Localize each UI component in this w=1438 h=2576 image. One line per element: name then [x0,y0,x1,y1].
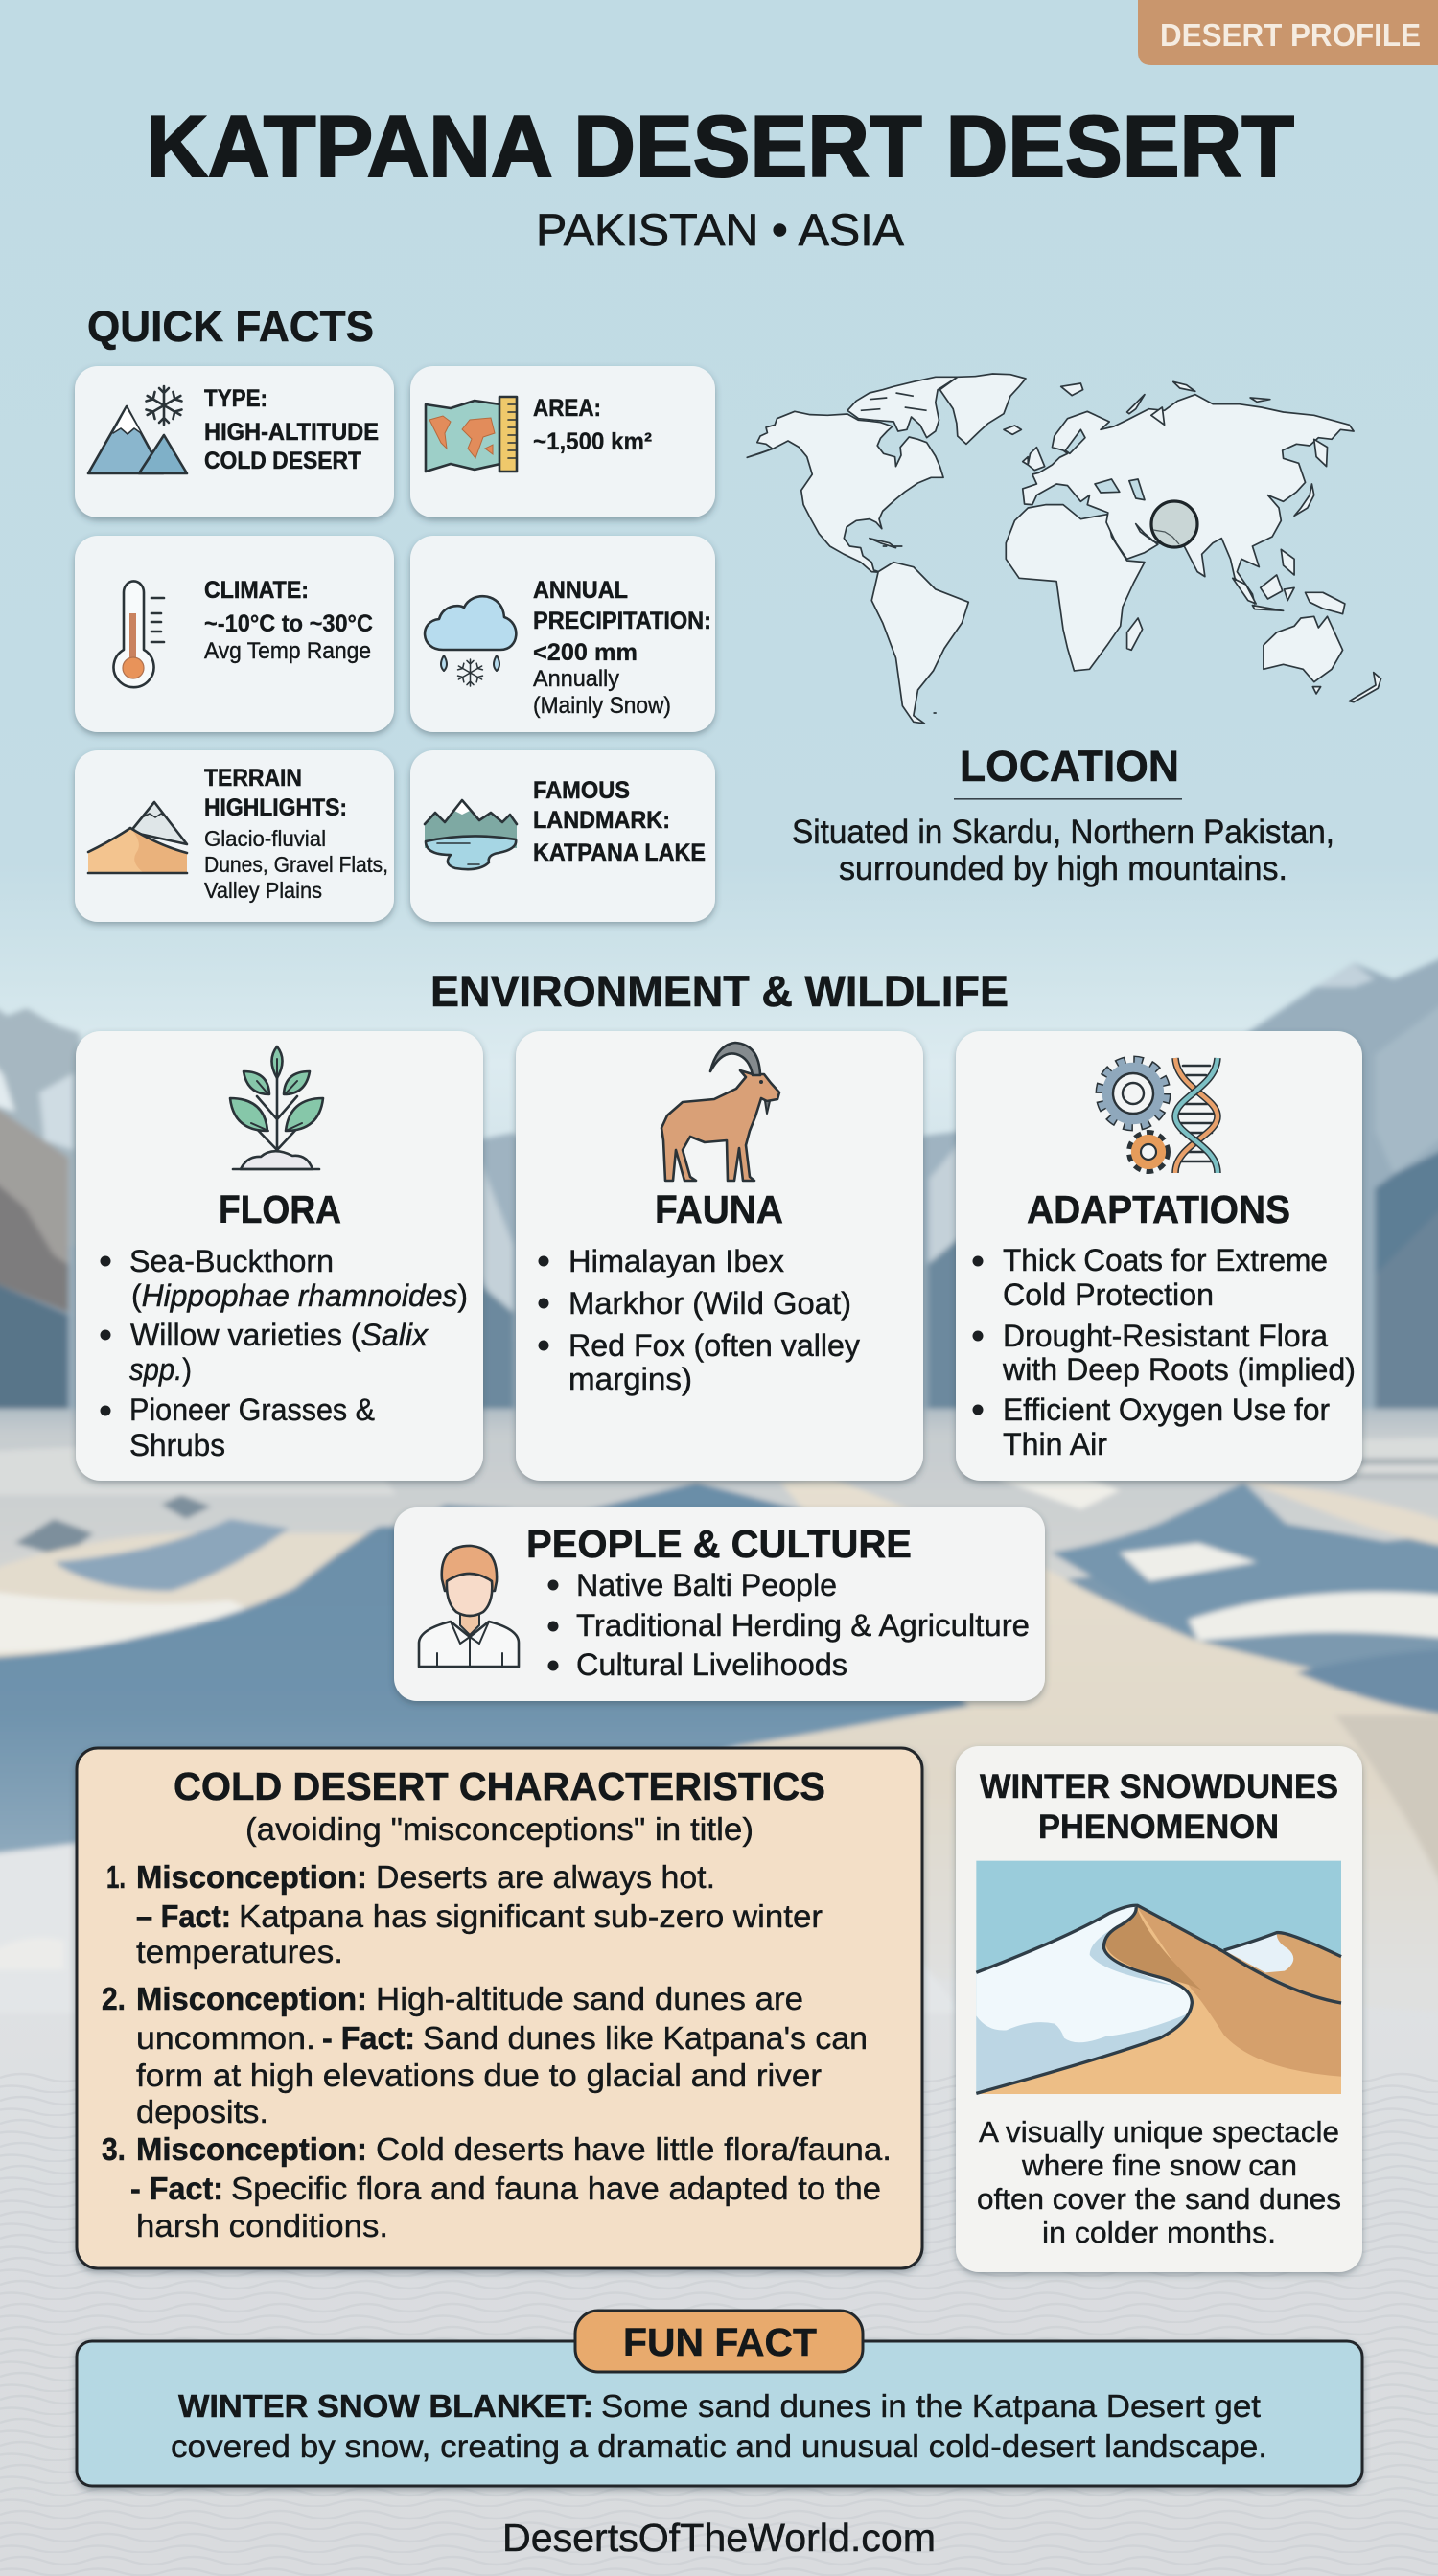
item 2: Misconception: [136,1981,367,2016]
list: adaptations: Thin Air [1003,1427,1107,1461]
panel: terrain highlights: HIGHLIGHTS: [204,794,347,821]
panel: flora [76,1031,483,1481]
panel: famous landmark: KATPANA LAKE [533,840,706,866]
icon: person [419,1546,519,1667]
item 2: uncommon. [136,2020,315,2056]
icon: thermometer [113,581,164,687]
panel: famous landmark: FAMOUS [533,777,630,804]
panel: adaptations [956,1031,1362,1481]
caption: A visually unique spectacle [979,2115,1339,2149]
list: adaptations [972,1243,1356,1461]
icon: dune and mountain [88,802,187,873]
item 3: harsh conditions. [136,2208,388,2243]
list: flora species: Pioneer Grasses & [129,1392,375,1427]
item 1: 1. [106,1859,126,1895]
list: fauna species: Red Fox (often valley [568,1328,860,1363]
list: fauna species [539,1244,860,1396]
item 2 [102,1981,868,2129]
item 1: – Fact: [136,1898,231,1934]
heading [980,1768,1338,1846]
caption: where fine snow can [1021,2149,1297,2182]
panel: fauna: FAUNA [655,1187,783,1231]
item 1: temperatures. [136,1934,343,1969]
list: adaptations: Efficient Oxygen Use for [1003,1392,1330,1427]
heading: location: LOCATION [960,742,1179,791]
text: fun fact body: Some sand dunes in the Katpana Desert get [601,2388,1261,2424]
panel: winter snowdunes phenomenon [956,1746,1362,2272]
item 2: Sand dunes like Katpana's can [423,2020,868,2056]
panel: climate [75,536,394,732]
panel: terrain highlights: Dunes, Gravel Flats, [204,852,388,877]
list: flora species: spp.) [129,1352,192,1387]
badge: fun fact: FUN FACT [623,2320,817,2364]
panel: type [75,366,394,518]
item 2: - Fact: [322,2020,415,2056]
panel: people and culture: PEOPLE & CULTURE [526,1522,912,1566]
list: fauna species: Markhor (Wild Goat) [568,1286,851,1321]
text: location description: surrounded by high mountains. [839,850,1287,887]
icon: cloud with rain and snow [425,596,516,686]
list: fauna species: margins) [568,1362,692,1396]
panel: famous landmark [410,750,715,922]
list: people: Cultural Livelihoods [576,1647,847,1682]
list: flora species: Shrubs [129,1428,225,1462]
caption: in colder months. [1042,2216,1276,2249]
panel: area: AREA: [533,395,601,422]
item 3 [102,2131,892,2243]
panel: annual precipitation [410,536,715,732]
footer: DesertsOfTheWorld.com [502,2516,936,2560]
panel: annual precipitation: (Mainly Snow) [533,693,671,719]
panel: area: ~1,500 km² [533,428,652,455]
panel: climate: ~-10°C to ~30°C [204,610,373,637]
text: location description: Situated in Skardu, Northern Pakistan, [792,814,1334,851]
icon: mountains and snowflake [88,386,187,473]
heading: quick facts: QUICK FACTS [87,302,374,351]
illustration: snow-covered dunes [976,1861,1341,2094]
item 1 [106,1859,823,1969]
panel: adaptations: ADAPTATIONS [1027,1187,1290,1231]
panel: flora: FLORA [219,1187,341,1231]
icon: lake and mountains [425,800,517,869]
text: fun fact body: covered by snow, creating a dramatic and unusual cold-desert landscape. [171,2428,1267,2464]
panel: famous landmark: LANDMARK: [533,807,670,834]
list: fauna species: Himalayan Ibex [568,1244,784,1278]
panel: terrain highlights: TERRAIN [204,765,302,792]
panel: annual precipitation: PRECIPITATION: [533,608,711,634]
list: adaptations: Drought-Resistant Flora [1003,1319,1328,1353]
heading: PHENOMENON [1038,1808,1279,1846]
panel: cold desert characteristics [77,1748,922,2268]
heading: WINTER SNOWDUNES [980,1768,1338,1806]
panel: climate: Avg Temp Range [204,638,371,664]
panel: fauna [516,1031,923,1481]
list: people [548,1568,1030,1682]
icon: gears and DNA [1101,1058,1218,1173]
panel: annual precipitation: Annually [533,666,619,692]
item 3: Misconception: [136,2131,367,2167]
icon: map and ruler [426,397,517,472]
item 1: Katpana has significant sub-zero winter [239,1898,823,1934]
list: adaptations: Cold Protection [1003,1277,1214,1312]
list: flora species: (Hippophae rhamnoides) [131,1278,468,1313]
item 2: 2. [102,1981,126,2016]
panel: type: COLD DESERT [204,448,361,474]
panel: people and culture [394,1507,1045,1701]
panel: annual precipitation: ANNUAL [533,577,628,604]
caption [977,2115,1341,2249]
item 2: form at high elevations due to glacial and river [136,2058,822,2093]
item 1: Misconception: [136,1859,367,1895]
panel: type: HIGH-ALTITUDE [204,419,379,446]
icon: ibex [661,1043,779,1181]
text: location description [792,814,1334,887]
panel: annual precipitation: <200 mm [533,639,638,666]
panel: terrain highlights: Glacio-fluvial [204,826,326,851]
panel: terrain highlights [75,750,394,922]
item 2: High-altitude sand dunes are [376,1981,803,2016]
title: KATPANA DESERT DESERT [146,99,1294,196]
panel: type: TYPE: [204,385,267,412]
panel: area [410,366,715,518]
badge: desert profile: DESERT PROFILE [1160,17,1421,53]
item 3: Cold deserts have little flora/fauna. [376,2131,892,2167]
text: fun fact body [171,2388,1267,2464]
heading: environment and wildlife: ENVIRONMENT & WILDLIFE [430,967,1009,1016]
panel: climate: CLIMATE: [204,577,309,604]
caption: often cover the sand dunes [977,2182,1341,2216]
item 3: - Fact: [130,2171,223,2206]
item 2: deposits. [136,2094,268,2129]
panel: fun fact [77,2311,1362,2486]
panel: terrain highlights: Valley Plains [204,878,322,903]
list: flora species: Willow varieties (Salix [130,1318,429,1352]
item 3: 3. [102,2131,126,2167]
list: people: Traditional Herding & Agriculture [576,1608,1030,1643]
list: flora species: Sea-Buckthorn [129,1244,334,1278]
list: adaptations: with Deep Roots (implied) [1002,1352,1356,1387]
subheading: (avoiding "misconceptions" in title) [245,1811,754,1847]
icon: plant [230,1046,323,1169]
chart: world map with Pakistan marked [747,374,1381,724]
subtitle: PAKISTAN • ASIA [536,204,905,255]
marker: Pakistan circle [1151,501,1197,547]
badge: fun fact [575,2311,863,2372]
text: fun fact body: WINTER SNOW BLANKET: [178,2388,593,2424]
item 3: Specific flora and fauna have adapted to the [231,2171,881,2206]
list: people: Native Balti People [576,1568,837,1602]
heading: COLD DESERT CHARACTERISTICS [174,1764,825,1808]
item 1: Deserts are always hot. [376,1859,715,1895]
list: adaptations: Thick Coats for Extreme [1003,1243,1328,1277]
list: flora species [100,1244,468,1462]
badge: desert profile [1138,0,1438,65]
